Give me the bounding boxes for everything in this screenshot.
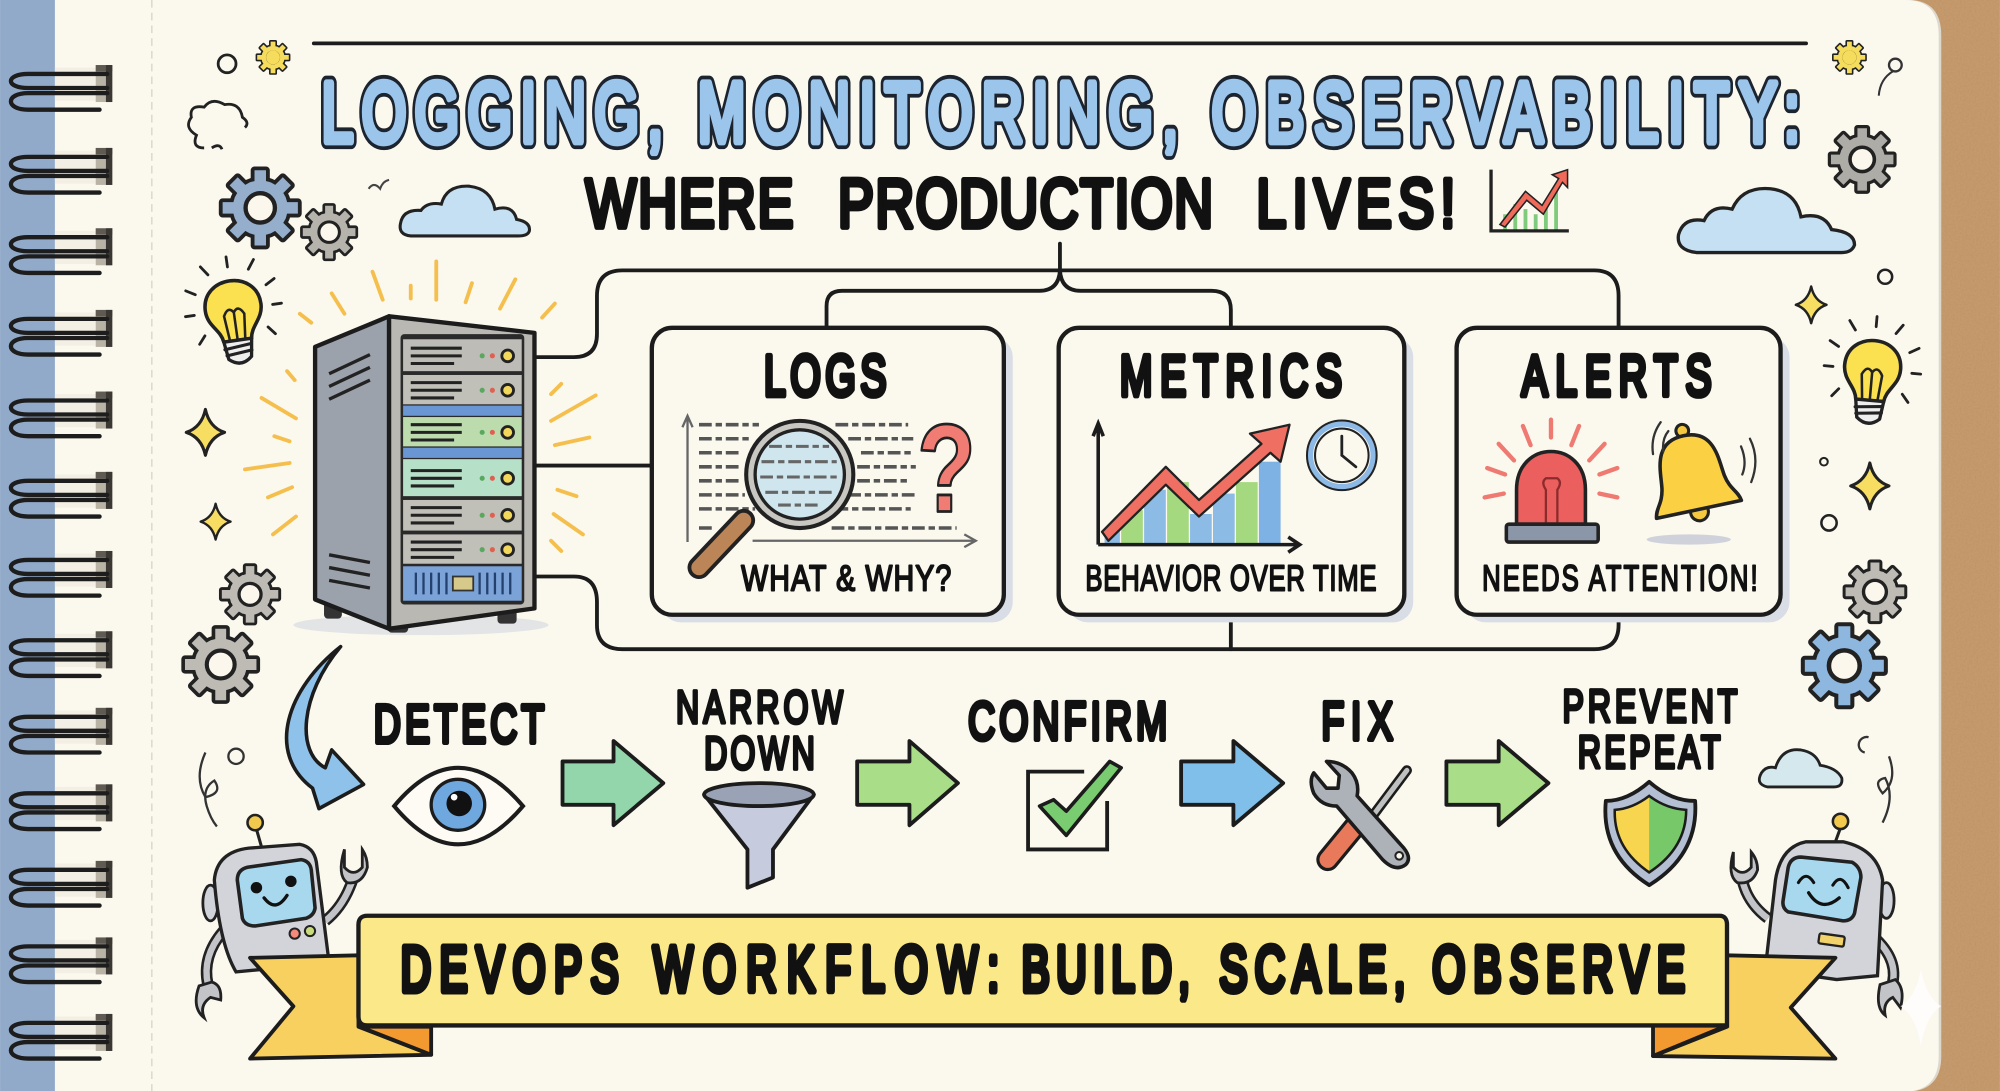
label: confirm: CONFIRM — [968, 691, 1167, 751]
icon: small cloud right — [1759, 750, 1842, 787]
icon: red siren — [1485, 420, 1617, 542]
icon: sparkle right lower — [1851, 463, 1889, 509]
chart: rising bars with trend arrow — [1093, 423, 1300, 552]
workflow: detect — [374, 694, 544, 844]
title: OBSERVABILITY: — [1212, 67, 1800, 160]
panel: alerts — [1457, 328, 1789, 622]
banner right tail — [1653, 955, 1835, 1059]
label: narrow down: DOWN — [704, 729, 815, 780]
panel: logs — [652, 328, 1013, 622]
banner text: OBSERVE — [1432, 934, 1685, 1005]
arrow: fix to prevent repeat — [1446, 741, 1548, 825]
arrow: confirm to fix — [1181, 741, 1283, 825]
icon: ringing bell — [1639, 416, 1755, 545]
icon: gear gray lower right — [1844, 561, 1906, 623]
icon: sparkle right upper — [1796, 286, 1826, 323]
banner text: WORKFLOW: — [653, 934, 999, 1005]
doodles: top left — [189, 41, 389, 189]
label: narrow down: NARROW — [676, 683, 843, 734]
icon: shield — [1605, 782, 1695, 885]
icon: wrench and screwdriver — [1311, 761, 1408, 868]
label: prevent repeat: REPEAT — [1578, 727, 1721, 778]
icon: light bulb left — [178, 250, 289, 370]
heading: logs: LOGS — [764, 345, 886, 408]
workflow: fix — [1311, 691, 1408, 868]
icon: gear blue — [221, 168, 300, 247]
title — [321, 67, 1800, 160]
icon: gear gray right — [1829, 127, 1895, 192]
workflow: prevent repeat — [1562, 681, 1750, 885]
heading: alerts: ALERTS — [1522, 345, 1712, 408]
icon: gear gray lower left — [220, 565, 280, 624]
robot left — [196, 815, 367, 1018]
banner text: BUILD, — [1022, 934, 1190, 1005]
icon: gear blue bottom right — [1803, 624, 1886, 707]
icon: sparkle left upper — [186, 409, 225, 455]
title: LOGGING, — [321, 67, 663, 160]
icon: light bulb right — [1819, 312, 1925, 427]
connector lines from server to panels — [537, 244, 1619, 649]
icon: clock — [1307, 421, 1376, 490]
label: detect: DETECT — [374, 694, 544, 754]
icon: rising chart beside subtitle — [1491, 170, 1569, 231]
icon: log lines with magnifier — [682, 416, 976, 568]
doodles: lower margin right — [1859, 737, 1892, 823]
subtitle: LIVES! — [1256, 166, 1455, 243]
label: fix: FIX — [1321, 691, 1393, 751]
icon: gear gray bottom left — [183, 627, 258, 702]
caption: metrics: BEHAVIOR OVER TIME — [1085, 558, 1377, 599]
banner text: DEVOPS — [401, 934, 619, 1005]
banner left tail — [250, 955, 431, 1059]
icon: cloud left — [400, 186, 529, 236]
icon: funnel — [704, 783, 814, 888]
arrow: detect to narrow down — [563, 741, 663, 825]
curved blue arrow — [287, 647, 364, 809]
title: OBSERVABILITY: — [1212, 67, 1800, 160]
heading: metrics: METRICS — [1120, 345, 1342, 408]
banner text: SCALE, — [1219, 934, 1405, 1005]
title: MONITORING, — [698, 67, 1178, 160]
spiral binding rings — [11, 65, 112, 1059]
workflow: narrow down — [676, 683, 856, 888]
subtitle: PRODUCTION — [838, 166, 1213, 243]
radiating rays around server — [245, 261, 596, 551]
subtitle: WHERE — [586, 166, 793, 243]
workflow: confirm — [968, 691, 1167, 849]
icon: checkbox with tick — [1028, 761, 1121, 849]
title: MONITORING, — [698, 67, 1178, 160]
label: prevent repeat: PREVENT — [1562, 681, 1737, 732]
doodles: lower margin left — [200, 749, 244, 826]
robot right — [1731, 814, 1902, 1015]
doodles: top right — [1820, 41, 1902, 531]
icon: question mark: ? — [917, 399, 976, 538]
icon: sparkle left lower — [201, 504, 231, 540]
banner: devops workflow — [250, 916, 1835, 1059]
server rack illustration — [245, 261, 596, 635]
icon: eye — [394, 768, 523, 844]
title: LOGGING, — [321, 67, 663, 160]
icon: pale sparkle watermark — [1900, 969, 1941, 1046]
icon: cloud right — [1678, 189, 1855, 253]
caption: alerts: NEEDS ATTENTION! — [1482, 558, 1758, 599]
banner body — [358, 916, 1727, 1025]
icon: gear gray — [301, 204, 357, 260]
title rule — [314, 42, 1806, 45]
left blue binding strip — [0, 0, 55, 1091]
panel: metrics — [1059, 328, 1413, 622]
arrow: narrow down to confirm — [857, 741, 958, 825]
caption: logs: WHAT & WHY? — [741, 558, 951, 598]
server units — [403, 339, 522, 601]
